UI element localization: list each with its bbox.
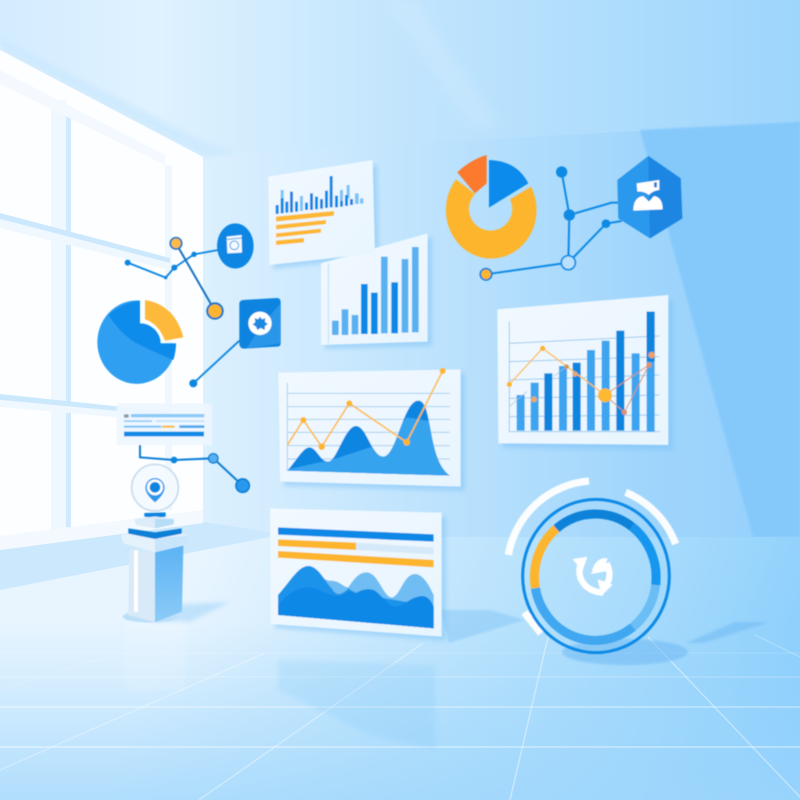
panel: bar and line chart — [497, 295, 668, 445]
inner ring segments — [534, 514, 656, 640]
window — [0, 50, 203, 550]
network nodes — [480, 166, 610, 280]
data points — [507, 346, 655, 415]
yellow line series — [287, 368, 446, 450]
window glass — [0, 50, 203, 550]
grid lines — [287, 383, 450, 471]
beacon globe with pin — [132, 464, 178, 511]
bars — [517, 312, 655, 432]
lower wall below window — [0, 522, 300, 595]
trend lines — [509, 348, 649, 412]
ceiling shadow above window — [0, 38, 235, 158]
floor tile lines — [0, 635, 800, 800]
floor bottom tint — [0, 620, 800, 800]
icon: round document badge — [217, 223, 254, 269]
pie chart — [97, 300, 183, 384]
icon: refresh arrows — [573, 557, 612, 595]
window mullions — [0, 70, 203, 550]
panel: small bar chart with yellow bars — [268, 160, 375, 265]
mountain chart — [278, 566, 434, 628]
network nodes — [125, 238, 223, 387]
icon: hexagon person badge — [617, 156, 682, 238]
donut chart — [446, 155, 537, 259]
ceiling light streak — [385, 0, 500, 128]
back wall right beam — [640, 122, 800, 537]
white outer arcs — [508, 481, 676, 633]
donut chart and network with hexagon — [446, 155, 682, 280]
grid lines — [509, 322, 660, 432]
network lines — [128, 243, 239, 383]
panel: area and line chart — [278, 367, 462, 488]
area shape — [287, 400, 450, 476]
icon: square gear badge — [239, 298, 281, 349]
panel: progress bars and mountain chart — [270, 508, 442, 637]
pedestal — [121, 512, 189, 623]
pie chart and left network — [97, 223, 281, 387]
small data card — [117, 403, 212, 445]
connector line — [140, 445, 243, 486]
ceiling — [0, 0, 800, 155]
panel shadows — [272, 165, 673, 641]
connector nodes — [171, 454, 249, 492]
floor — [0, 537, 800, 800]
circular gauge — [508, 481, 676, 653]
outer ring — [523, 499, 669, 653]
panel: tall bar chart — [321, 233, 428, 345]
beacon pedestal and card — [117, 403, 249, 623]
progress bars — [278, 527, 434, 567]
network lines — [486, 172, 622, 274]
floor shadows and reflections — [125, 602, 770, 750]
